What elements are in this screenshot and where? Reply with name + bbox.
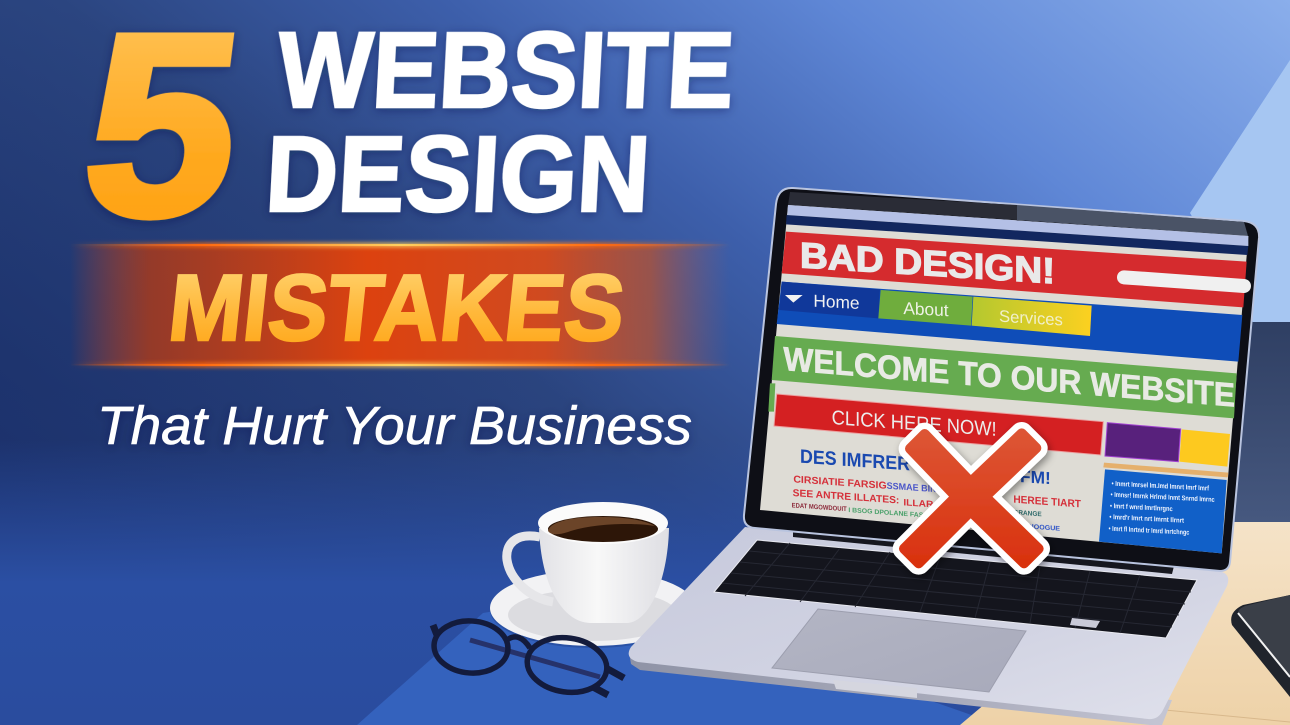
garbled page copy: GRANGE [1013,509,1042,518]
keyboard [714,540,1197,638]
blue list box: • Imrd'r Imrt nrt Imrnt Ilrnrt [1109,514,1185,525]
blue list box [1099,469,1227,553]
navigation bar: Home [813,291,860,313]
green welcome banner: WELCOME TO OUR WEBSITE [783,341,1235,415]
garbled page copy: HEREE TIART [1013,494,1081,510]
garbled page copy [792,446,1081,533]
red call to action [774,394,1103,455]
blue list box: • Imrt fl Inrtnd tr Imrd Inrtchngc [1109,526,1189,537]
navigation bar: Services [999,307,1063,329]
blue list box: • Imrt f wnrd Imrtlnrgnc [1110,503,1173,513]
navigation bar: About [903,298,949,320]
icon: red X mark [904,433,1039,563]
icon: coffee cup on saucer [490,502,696,648]
laptop hinge [793,528,1175,574]
garbled page copy: DIOOGUE [1027,523,1061,533]
garbled page copy: SSMAE BIN [887,481,937,494]
title: WEBSITE: WEBSITE [275,9,737,130]
red header banner [782,232,1247,307]
blue list box: • Imnsr! Imrnk Hrlrnd Inmt Snrnd Imrnc [1111,492,1215,504]
garbled page copy: ILLAR [903,497,934,509]
laptop [629,188,1259,725]
website screenshot on screen [760,205,1248,563]
banner: mistakes [70,243,730,367]
garbled page copy: SEE ANTRE ILLATES: [793,488,899,506]
notebook on desk [1231,595,1290,697]
blue list box: • Inmrt Imrsel Im.Imd Imnrt Imrf Imrf [1112,481,1210,493]
garbled page copy: FM! [1020,466,1051,488]
subtitle: That Hurt Your Business [97,396,692,456]
navigation bar [777,282,1242,362]
search pill [1124,277,1244,286]
laptop base [629,527,1228,725]
browser bars [786,205,1248,255]
laptop bezel [744,188,1259,571]
garbled page copy: EDAT MGOWDOUIT [792,502,847,513]
colour blocks [1103,423,1230,477]
garbled page copy: I BSOG DPOLANE FAS [848,507,924,519]
header text: BAD DESIGN! [800,234,1055,291]
title: DESIGN: DESIGN [263,113,653,234]
icon: eyeglasses [432,618,624,697]
garbled page copy: DES IMFRER [800,446,910,475]
heading: MISTAKES: MISTAKES [164,255,630,360]
garbled page copy: CIRSIATIE FARSIG [793,474,887,492]
screen background [760,205,1248,553]
red call to action: CLICK HERE NOW! [832,407,997,441]
trackpad [772,609,1026,692]
